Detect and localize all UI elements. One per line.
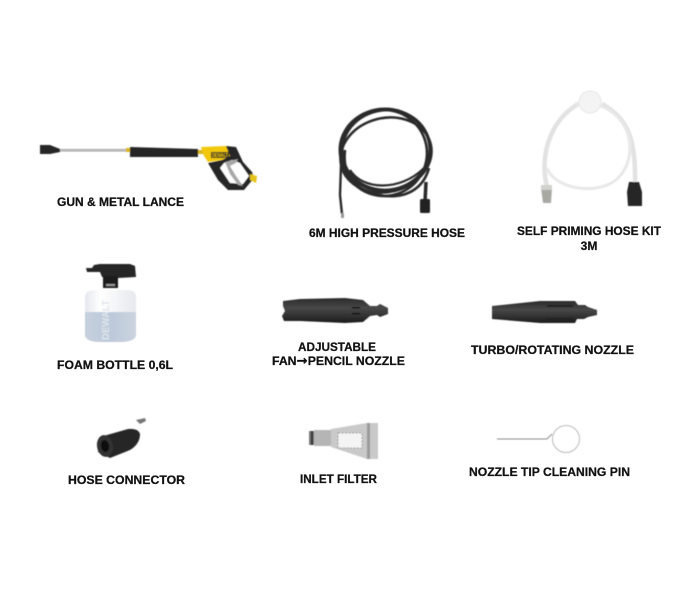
label: self priming hose kit: SELF PRIMING HOSE KIT [517,224,662,238]
item: foam bottle [57,264,173,372]
label: foam bottle: FOAM BOTTLE 0,6L [57,358,173,372]
item: gun and metal lance [40,145,257,209]
icon: hose connector [95,418,146,458]
icon: gun and lance: DEWALT [212,153,228,159]
icon: cleaning pin [497,426,580,452]
label: hose connector: HOSE CONNECTOR [68,473,185,487]
label: inlet filter: INLET FILTER [300,472,377,486]
icon: adjustable nozzle [282,298,388,323]
item: self priming hose kit [517,91,662,253]
label: 3M: 3M [581,239,597,253]
icon: inlet filter [309,423,378,459]
icon: white hose with float and connectors [541,91,642,206]
item: turbo nozzle [471,301,634,357]
label: turbo rotating nozzle: TURBO/ROTATING NOZZLE [471,343,634,357]
icon: turbo nozzle [492,301,597,323]
label: nozzle tip cleaning pin: NOZZLE TIP CLEANING PIN [469,465,630,479]
item: inlet filter [300,423,378,486]
label: fan to pencil nozzle: FAN→PENCIL NOZZLE [272,354,405,369]
icon: foam bottle: DEWALT [101,300,112,340]
label: adjustable: ADJUSTABLE [298,340,376,354]
label: gun and metal lance: GUN & METAL LANCE [57,195,184,209]
item: nozzle tip cleaning pin [469,426,630,479]
item: high pressure hose [309,103,465,240]
icon: coiled black hose [332,103,440,218]
icon: gun and lance [40,145,257,190]
label: high pressure hose: 6M HIGH PRESSURE HOSE [309,226,465,240]
item: adjustable nozzle [272,298,405,369]
item: hose connector [68,418,185,487]
